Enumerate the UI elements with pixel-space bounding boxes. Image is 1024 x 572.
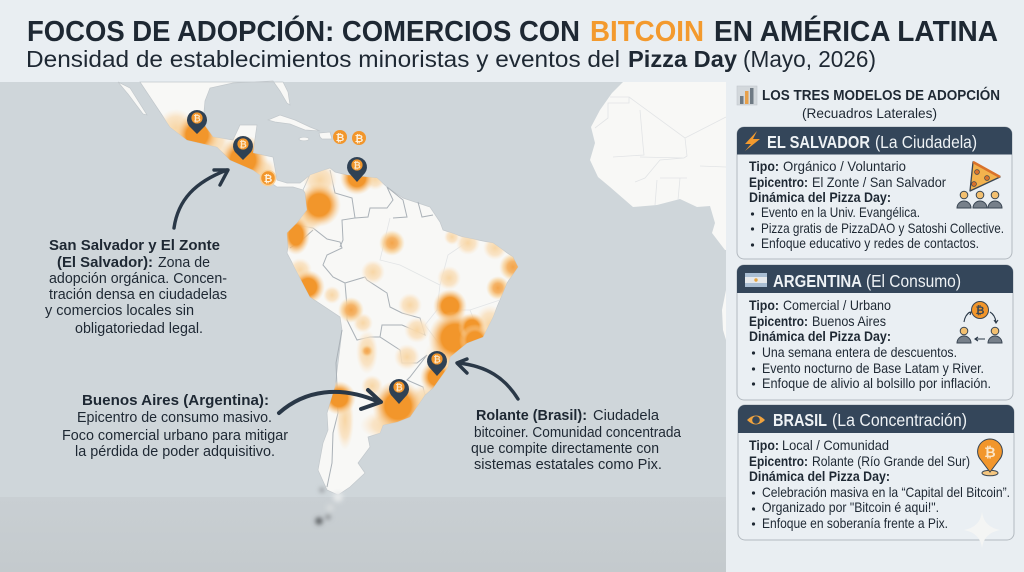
country borders bbox=[290, 170, 500, 487]
land: South America bbox=[287, 168, 518, 495]
card text bbox=[749, 438, 1010, 531]
card text: Evento en la Univ. Evangélica. bbox=[761, 205, 920, 220]
card text: Dinámica del Pizza Day: bbox=[749, 190, 891, 205]
card text: Buenos Aires bbox=[812, 314, 886, 329]
pin: El Salvador bbox=[233, 136, 253, 160]
callout: San Salvador y El Zonte: y comercios locales sin bbox=[45, 303, 194, 319]
card text: Comercial / Urbano bbox=[783, 298, 891, 313]
land: Africa bbox=[590, 82, 726, 340]
card text: Tipo: bbox=[749, 438, 779, 453]
card header: ARGENTINA bbox=[773, 271, 862, 291]
title: BITCOIN bbox=[590, 16, 704, 48]
callout: Rolante: Rolante (Brasil): bbox=[476, 408, 587, 424]
arrow: to Rolante bbox=[457, 359, 518, 399]
heat map density bbox=[157, 109, 527, 450]
sparkle bbox=[964, 512, 1000, 548]
land: North and Central America bbox=[118, 81, 309, 190]
callout: Buenos Aires: la pérdida de poder adquisitivo. bbox=[75, 444, 275, 460]
card header: BRASIL bbox=[773, 410, 827, 430]
callout: San Salvador y El Zonte: San Salvador y El Zonte bbox=[49, 238, 220, 254]
pin: Venezuela: ₿ bbox=[353, 160, 361, 172]
card text: Epicentro: bbox=[749, 454, 808, 469]
map panel bbox=[0, 81, 726, 572]
coin: Caribbean 2: ₿ bbox=[355, 133, 364, 145]
card header: (La Concentración) bbox=[832, 410, 967, 430]
icon: bitcoin map pin: ₿ bbox=[984, 445, 996, 461]
subtitle bbox=[26, 46, 876, 72]
icon: bitcoin map pin bbox=[978, 439, 1002, 476]
callout: Rolante: que compite directamente con bbox=[471, 441, 659, 457]
card text: Local / Comunidad bbox=[782, 438, 889, 453]
callout: San Salvador y El Zonte bbox=[45, 238, 227, 337]
card text: Enfoque en soberanía frente a Pix. bbox=[762, 516, 948, 531]
card text: Enfoque de alivio al bolsillo por inflación. bbox=[762, 376, 991, 391]
title: FOCOS DE ADOPCIÓN: COMERCIOS CON bbox=[27, 14, 580, 48]
card header: (El Consumo) bbox=[866, 271, 961, 291]
ocean bbox=[0, 82, 726, 572]
pin: El Salvador: ₿ bbox=[239, 140, 247, 150]
callout: Rolante: Ciudadela bbox=[593, 408, 660, 424]
card text bbox=[749, 298, 991, 391]
coin: Caribbean 1: ₿ bbox=[336, 132, 345, 144]
pin: Buenos Aires: ₿ bbox=[395, 382, 403, 394]
icon: circular economy bbox=[957, 302, 1002, 343]
icon: bar chart bbox=[737, 86, 757, 105]
title: EN AMÉRICA LATINA bbox=[714, 14, 998, 48]
card text: Organizado por "Bitcoin é aqui!". bbox=[762, 500, 939, 515]
icon: Argentina flag bbox=[745, 273, 767, 287]
pin: Rolante bbox=[427, 351, 447, 376]
land: Caribbean islands bbox=[268, 115, 332, 141]
card text: Enfoque educativo y redes de contactos. bbox=[761, 236, 979, 251]
coin: Costa Rica: ₿ bbox=[264, 173, 273, 185]
card text: Orgánico / Voluntario bbox=[783, 159, 906, 174]
panel heading: LOS TRES MODELOS DE ADOPCIÓN bbox=[762, 86, 1000, 104]
card text: Evento nocturno de Base Latam y River. bbox=[762, 361, 984, 376]
icon: circular economy: ₿ bbox=[976, 304, 985, 317]
callout: Buenos Aires: Epicentro de consumo masivo. bbox=[77, 410, 272, 426]
card text: Tipo: bbox=[749, 298, 779, 313]
callout: San Salvador y El Zonte: tración densa en ciudadelas bbox=[49, 287, 227, 303]
coin: Costa Rica bbox=[260, 170, 276, 186]
arrow: to Buenos Aires bbox=[279, 390, 381, 413]
pin: Mexico: ₿ bbox=[193, 114, 201, 124]
callout: Rolante: bitcoiner. Comunidad concentrada bbox=[474, 425, 682, 441]
card header bbox=[737, 127, 1012, 154]
card header bbox=[738, 405, 1014, 433]
subtitle: Pizza Day bbox=[628, 46, 737, 72]
callout: Rolante: sistemas estatales como Pix. bbox=[474, 457, 662, 473]
callout: San Salvador y El Zonte: Zona de bbox=[158, 255, 210, 271]
side panel bbox=[726, 82, 1024, 572]
callout: San Salvador y El Zonte: adopción orgánica. Concen- bbox=[49, 271, 227, 287]
card text: Tipo: bbox=[749, 159, 779, 174]
coin: Caribbean 2 bbox=[352, 131, 366, 145]
pin: Venezuela bbox=[347, 157, 367, 182]
pin: Mexico bbox=[187, 110, 207, 134]
callout: Rolante bbox=[471, 408, 682, 473]
subtitle: Densidad de establecimientos minoristas y eventos del bbox=[26, 46, 620, 72]
icon: pizza and people bbox=[957, 162, 1002, 208]
card text: Rolante (Río Grande del Sur) bbox=[812, 454, 970, 469]
card: Brasil bbox=[738, 405, 1014, 548]
callout: Buenos Aires bbox=[62, 393, 288, 460]
pin: Buenos Aires bbox=[389, 379, 409, 404]
callout: Buenos Aires: Foco comercial urbano para mitigar bbox=[62, 428, 288, 444]
card header: (La Ciudadela) bbox=[875, 132, 977, 152]
southern fade band bbox=[0, 497, 726, 572]
card header: EL SALVADOR bbox=[767, 132, 870, 152]
card: El Salvador bbox=[737, 127, 1012, 259]
subtitle: (Mayo, 2026) bbox=[743, 46, 876, 72]
Tierra del Fuego smudge bbox=[315, 488, 343, 525]
panel heading bbox=[762, 86, 1000, 121]
card header bbox=[737, 265, 1013, 293]
card text bbox=[749, 159, 1004, 251]
card text: El Zonte / San Salvador bbox=[812, 175, 946, 190]
card text: Epicentro: bbox=[749, 314, 808, 329]
panel heading: (Recuadros Laterales) bbox=[802, 105, 937, 121]
callout: San Salvador y El Zonte: obligatoriedad legal. bbox=[75, 321, 203, 337]
card: Argentina bbox=[737, 265, 1013, 400]
title bbox=[27, 14, 998, 48]
card text: Dinámica del Pizza Day: bbox=[749, 329, 891, 344]
callout: San Salvador y El Zonte: (El Salvador): bbox=[57, 255, 153, 271]
card text: Dinámica del Pizza Day: bbox=[749, 469, 890, 484]
card text: Epicentro: bbox=[749, 175, 808, 190]
icon: lightning bolt bbox=[745, 131, 760, 151]
pin: Rolante: ₿ bbox=[433, 354, 441, 366]
card text: Una semana entera de descuentos. bbox=[762, 345, 957, 360]
callout: Buenos Aires: Buenos Aires (Argentina): bbox=[82, 393, 269, 409]
coin: Caribbean 1 bbox=[333, 130, 347, 144]
arrow: to El Salvador bbox=[174, 170, 228, 228]
icon: eye bbox=[747, 416, 765, 424]
